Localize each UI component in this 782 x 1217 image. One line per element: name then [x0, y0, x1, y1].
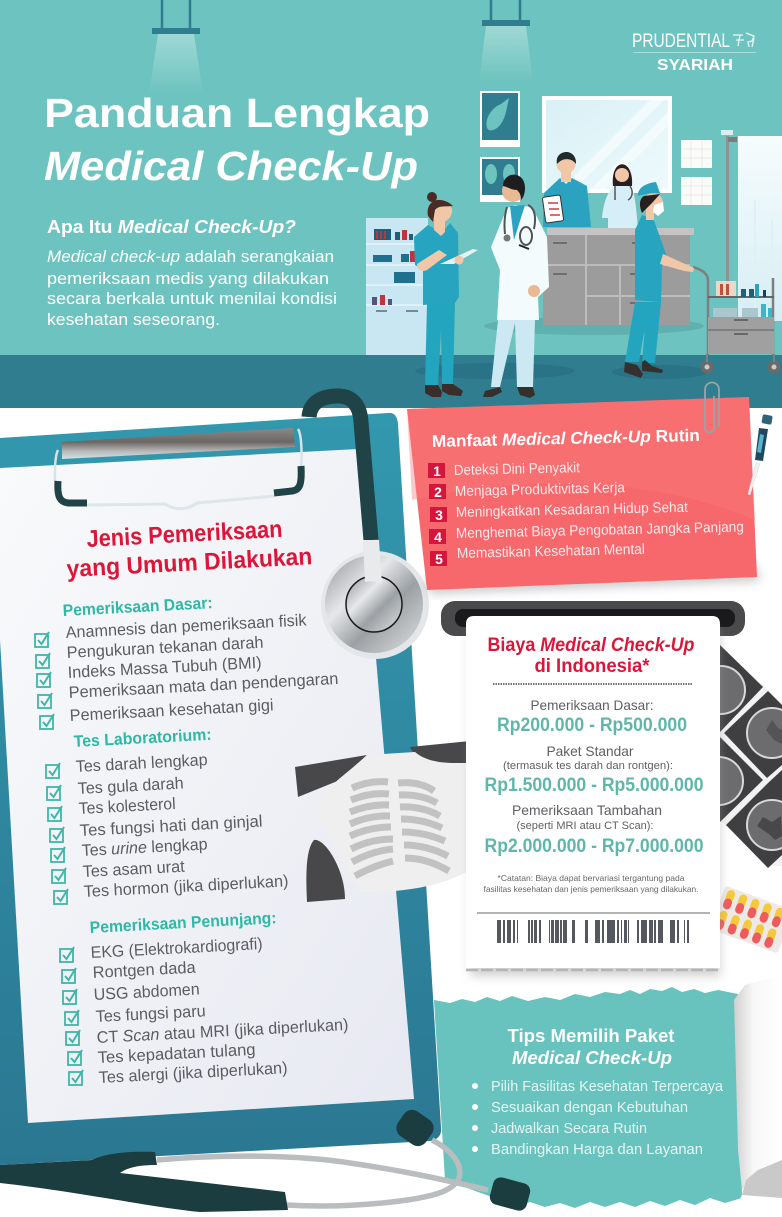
checklist: pemeriksaan penunjang: Tes alergi (jika diperlukan) [98, 1059, 288, 1087]
checklist: pemeriksaan penunjang: Tes fungsi paru [95, 1002, 206, 1026]
receipt printer slot [441, 601, 745, 636]
benefits list: Meningkatkan Kesadaran Hidup Sehat [456, 500, 688, 521]
price: pemeriksaan tambahan: Pemeriksaan Tambahan [512, 802, 662, 818]
receipt footnote: *Catatan: Biaya dapat bervariasi tergantung pada [498, 873, 685, 883]
chest x-ray film [295, 741, 470, 902]
price: pemeriksaan dasar [497, 697, 687, 736]
tips list: Pilih Fasilitas Kesehatan Terpercaya [491, 1079, 724, 1095]
intro text block [47, 217, 337, 329]
clipboard: board [0, 413, 441, 1165]
heading: jenis pemeriksaan: yang Umum Dilakukan [66, 543, 313, 583]
ceiling lamp right [479, 0, 533, 82]
stethoscope: tube and chest piece [309, 396, 429, 659]
tips list: Sesuaikan dengan Kebutuhan [491, 1100, 688, 1116]
price: paket standar: Paket Standar [546, 743, 634, 759]
x-ray frames on the wall [480, 91, 520, 202]
receipt footnote: fasilitas kesehatan dan jenis pemeriksaan yang dilakukan. [484, 884, 698, 894]
heading: jenis pemeriksaan: Jenis Pemeriksaan [86, 516, 283, 553]
heading: manfaat: Manfaat Medical Check-Up Rutin [432, 426, 700, 451]
checklist: pemeriksaan penunjang: Pemeriksaan Penunjang: [89, 909, 277, 937]
benefits list [428, 460, 744, 567]
floor shadows [415, 363, 708, 379]
clipboard: metal clip [55, 428, 302, 509]
checklist: pemeriksaan dasar [35, 594, 339, 729]
receptionist: male staff [542, 152, 591, 227]
price: paket standar [484, 743, 704, 796]
benefits list: 5 [435, 551, 443, 567]
heading: jenis pemeriksaan [66, 516, 313, 583]
note: manfaat medical check-up [407, 397, 760, 594]
receipt: biaya medical check-up [466, 616, 720, 976]
price: pemeriksaan dasar: Pemeriksaan Dasar: [530, 697, 654, 713]
checklist: pemeriksaan penunjang: Tes kepadatan tulang [97, 1041, 256, 1067]
receipt heading: di Indonesia* [534, 656, 650, 677]
checklist: pemeriksaan penunjang [60, 909, 349, 1087]
torn page curl [730, 975, 782, 1217]
logo: Prudential Syariah: PRUDENTIAL [632, 31, 730, 52]
benefits list: 4 [434, 529, 442, 545]
price: paket standar: Rp1.500.000 - Rp5.000.000 [484, 775, 704, 796]
checklist: tes laboratorium: Tes hormon (jika diperlukan) [83, 872, 289, 901]
intro text block: pemeriksaan medis yang dilakukan [47, 269, 329, 288]
checklist: tes laboratorium: Tes gula darah [77, 774, 184, 798]
tips heading [508, 1026, 675, 1068]
checklist: pemeriksaan dasar: Pemeriksaan mata dan pendengaran [68, 670, 339, 702]
tips list: Bandingkan Harga dan Layanan [491, 1142, 703, 1158]
barcode [497, 920, 689, 943]
checklist: pemeriksaan dasar: Pemeriksaan kesehatan gigi [69, 696, 274, 725]
price: pemeriksaan tambahan: Rp2.000.000 - Rp7.000.000 [484, 836, 704, 857]
checklist: pemeriksaan dasar: Pemeriksaan Dasar: [62, 594, 213, 620]
benefits list: Menjaga Produktivitas Kerja [455, 480, 626, 500]
paperclip [705, 382, 719, 432]
panel: tips memilih paket [434, 987, 742, 1208]
price: paket standar: (termasuk tes darah dan rontgen): [503, 760, 673, 772]
checklist: tes laboratorium: Tes urine lengkap [81, 835, 208, 860]
pill blister pack [710, 886, 782, 954]
brain scan films [695, 645, 782, 868]
mirror [542, 96, 672, 193]
price: pemeriksaan tambahan: (seperti MRI atau CT Scan): [516, 820, 654, 832]
doctor in white coat [483, 175, 549, 398]
intro text block: Medical check-up adalah serangkaian [47, 247, 334, 266]
receipt heading: Biaya Medical Check-Up [488, 635, 694, 656]
price: pemeriksaan tambahan [484, 802, 704, 857]
benefits list: Menghemat Biaya Pengobatan Jangka Panjang [456, 519, 744, 542]
intro text block: Apa Itu Medical Check-Up? [47, 217, 296, 237]
medical cart [693, 267, 780, 374]
receipt heading [488, 635, 694, 677]
nurse pushing cart [624, 182, 694, 378]
checklist: pemeriksaan penunjang: USG abdomen [93, 980, 200, 1004]
tips list [472, 1079, 724, 1158]
tips list: Jadwalkan Secara Rutin [491, 1121, 647, 1137]
checklist: pemeriksaan penunjang: CT Scan atau MRI (jika diperlukan) [96, 1016, 349, 1047]
benefits list: 2 [434, 484, 442, 500]
reception desk [484, 152, 704, 335]
checklist: tes laboratorium: Tes kolesterol [78, 795, 176, 818]
checklist: tes laboratorium: Tes asam urat [82, 858, 185, 881]
title: Medical Check-Up [44, 143, 418, 189]
tips heading: Medical Check-Up [512, 1048, 672, 1068]
tips heading: Tips Memilih Paket [508, 1026, 675, 1046]
receptionist: female staff [602, 164, 638, 228]
background: clinic wall [0, 0, 782, 356]
checklist: pemeriksaan dasar: Indeks Massa Tubuh (BMI) [67, 654, 262, 682]
checklist: tes laboratorium: Tes fungsi hati dan ginjal [79, 812, 263, 840]
checklist: pemeriksaan penunjang: EKG (Elektrokardiografi) [90, 935, 263, 962]
logo: Prudential Syariah: SYARIAH [657, 57, 733, 74]
stethoscope: ear tubes [0, 1106, 532, 1212]
title [44, 90, 430, 189]
benefits list: Deteksi Dini Penyakit [454, 460, 580, 479]
intro text block: kesehatan seseorang. [47, 310, 220, 329]
clipboard: paper sheet [0, 449, 414, 1123]
wall charts [681, 140, 712, 205]
medicine cabinet [366, 218, 428, 355]
price: pemeriksaan dasar: Rp200.000 - Rp500.000 [497, 715, 687, 736]
benefits list: 3 [435, 507, 443, 523]
title: Panduan Lengkap [44, 90, 430, 136]
checklist: tes laboratorium: Tes Laboratorium: [73, 726, 212, 751]
receipt footnote [484, 873, 698, 894]
checklist: tes laboratorium: Tes darah lengkap [75, 751, 208, 776]
benefits list: Memastikan Kesehatan Mental [457, 542, 645, 562]
checklist: pemeriksaan dasar: Pengukuran tekanan darah [66, 634, 264, 662]
nurse with clipboard [414, 192, 478, 397]
thermometer [748, 414, 773, 495]
checklist: pemeriksaan penunjang: Rontgen dada [92, 959, 197, 982]
intro text block: secara berkala untuk menilai kondisi [47, 289, 337, 308]
checklist: tes laboratorium [46, 726, 289, 904]
curtain and drip stand [721, 130, 782, 321]
benefits list: 1 [433, 463, 441, 479]
checklist: pemeriksaan dasar: Anamnesis dan pemeriksaan fisik [65, 611, 308, 642]
background: clinic floor [0, 355, 782, 408]
ceiling lamp left [149, 0, 203, 94]
logo: Prudential Syariah [632, 31, 756, 74]
